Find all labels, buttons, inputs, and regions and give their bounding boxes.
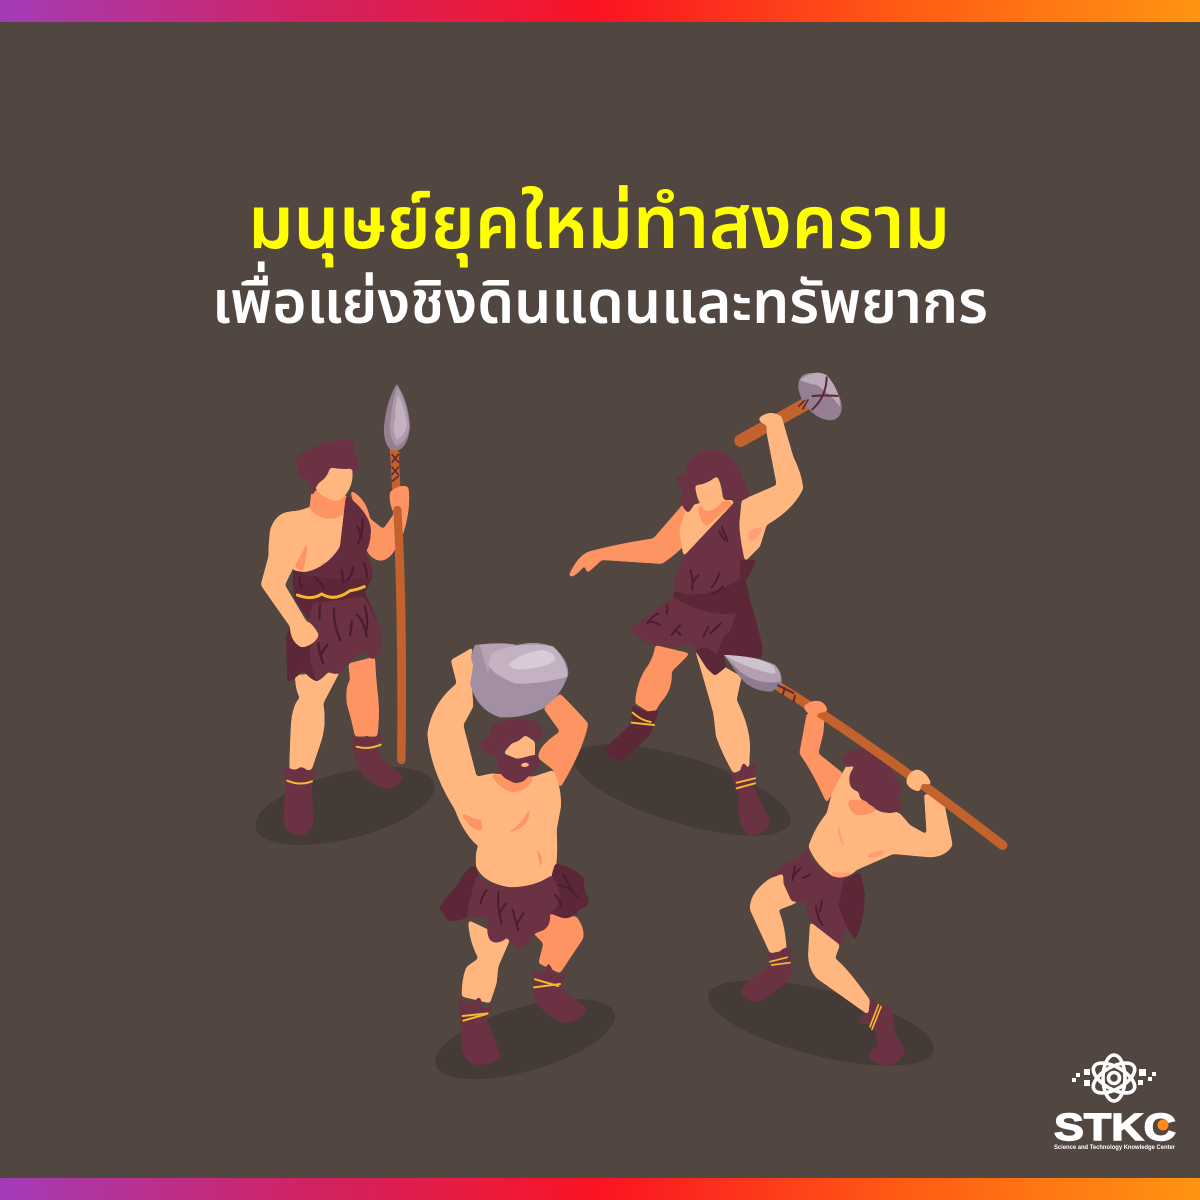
figure: caveman with upright spear xyxy=(261,384,410,835)
face xyxy=(503,735,535,760)
boot near xyxy=(282,767,319,835)
hand over skirt xyxy=(290,622,319,648)
title line 1: มนุษย์ยุคใหม่ทำสงคราม xyxy=(248,170,950,282)
near arm xyxy=(261,511,319,648)
rock xyxy=(470,643,568,717)
logo atom icon xyxy=(1089,1055,1139,1101)
title line 2: เพื่อแย่งชิงดินแดนและทรัพยากร xyxy=(212,259,988,350)
figure: caveman with stone axe xyxy=(568,365,850,835)
spear head and shaft xyxy=(384,384,410,760)
boot straps xyxy=(287,745,381,784)
neck xyxy=(491,774,533,793)
right leg xyxy=(533,913,584,973)
ground shadow: spear thrower xyxy=(700,963,942,1083)
skirt xyxy=(770,845,865,945)
spear head xyxy=(724,655,795,703)
front leg xyxy=(695,650,750,773)
back leg xyxy=(635,645,690,715)
right leg xyxy=(808,922,870,1015)
spear shaft xyxy=(780,687,1003,845)
right hand xyxy=(906,769,932,792)
garment back panel xyxy=(695,603,763,676)
boot front xyxy=(728,762,770,835)
neck xyxy=(309,490,347,519)
torso and right arm xyxy=(808,765,953,877)
ground shadow: spearman xyxy=(248,752,442,860)
far arm xyxy=(538,693,588,788)
torso xyxy=(270,500,347,572)
skirt dark panel xyxy=(838,872,865,941)
fold lines xyxy=(481,875,577,930)
belt xyxy=(297,587,364,598)
fold lines xyxy=(793,867,822,925)
neck xyxy=(848,800,880,815)
front leg xyxy=(289,672,340,770)
boot left xyxy=(740,946,793,1001)
torso xyxy=(455,770,561,887)
title xyxy=(212,170,988,350)
beard xyxy=(496,753,541,783)
right side drape xyxy=(740,560,757,580)
hand on rock xyxy=(451,647,473,685)
left leg xyxy=(462,920,510,1003)
logo orange dot xyxy=(1158,1120,1168,1130)
raised arm xyxy=(738,413,803,562)
skirt front xyxy=(467,875,560,949)
garment xyxy=(628,502,757,655)
face xyxy=(695,476,723,512)
torso xyxy=(679,497,735,557)
neck xyxy=(698,500,733,527)
left hand xyxy=(803,701,827,718)
waist band xyxy=(673,577,752,614)
logo caption: Science and Technology Knowledge Center xyxy=(1054,1145,1176,1151)
curly hair xyxy=(842,748,902,813)
boot right xyxy=(533,962,587,1023)
figure: bearded caveman lifting rock xyxy=(427,643,589,1065)
chest shading xyxy=(294,537,335,572)
ground shadow: rock man xyxy=(427,983,623,1095)
garment drape xyxy=(293,495,373,579)
spear lower shaft over hand xyxy=(397,510,402,759)
pointing arm xyxy=(568,500,687,577)
near arm xyxy=(427,647,492,847)
left arm xyxy=(799,713,843,803)
skirt back left xyxy=(438,865,487,921)
boot far xyxy=(351,733,403,788)
mouth xyxy=(519,762,531,767)
logo pixel squares xyxy=(1072,1069,1156,1086)
boot straps xyxy=(770,957,881,1029)
skirt back right xyxy=(550,863,589,918)
figure: caveman throwing spear xyxy=(724,655,1003,1066)
face xyxy=(315,467,353,501)
boot left xyxy=(458,996,501,1065)
back leg xyxy=(346,657,379,737)
left leg xyxy=(750,873,805,953)
far arm and hand xyxy=(350,486,409,561)
top gradient bar xyxy=(0,0,1200,22)
boot straps xyxy=(632,713,755,788)
logo wordmark: STKC xyxy=(1054,1107,1176,1149)
hair xyxy=(479,719,543,757)
garment xyxy=(286,495,381,683)
boot right xyxy=(858,997,905,1066)
skirt lighter panel xyxy=(308,597,381,682)
boots xyxy=(603,705,659,760)
ground shadow: axe man xyxy=(564,725,800,855)
garment fold lines xyxy=(299,520,367,663)
left hand over shaft xyxy=(803,701,827,718)
fold lines xyxy=(647,527,728,637)
boot straps xyxy=(463,979,560,1021)
bottom gradient bar xyxy=(0,1178,1200,1200)
hair xyxy=(293,439,359,497)
logo: STKC xyxy=(1054,1055,1176,1151)
hair xyxy=(675,449,750,513)
chest lines xyxy=(461,805,560,874)
stone axe xyxy=(741,365,850,441)
torso shading xyxy=(818,825,887,878)
armpit shade xyxy=(748,526,764,542)
